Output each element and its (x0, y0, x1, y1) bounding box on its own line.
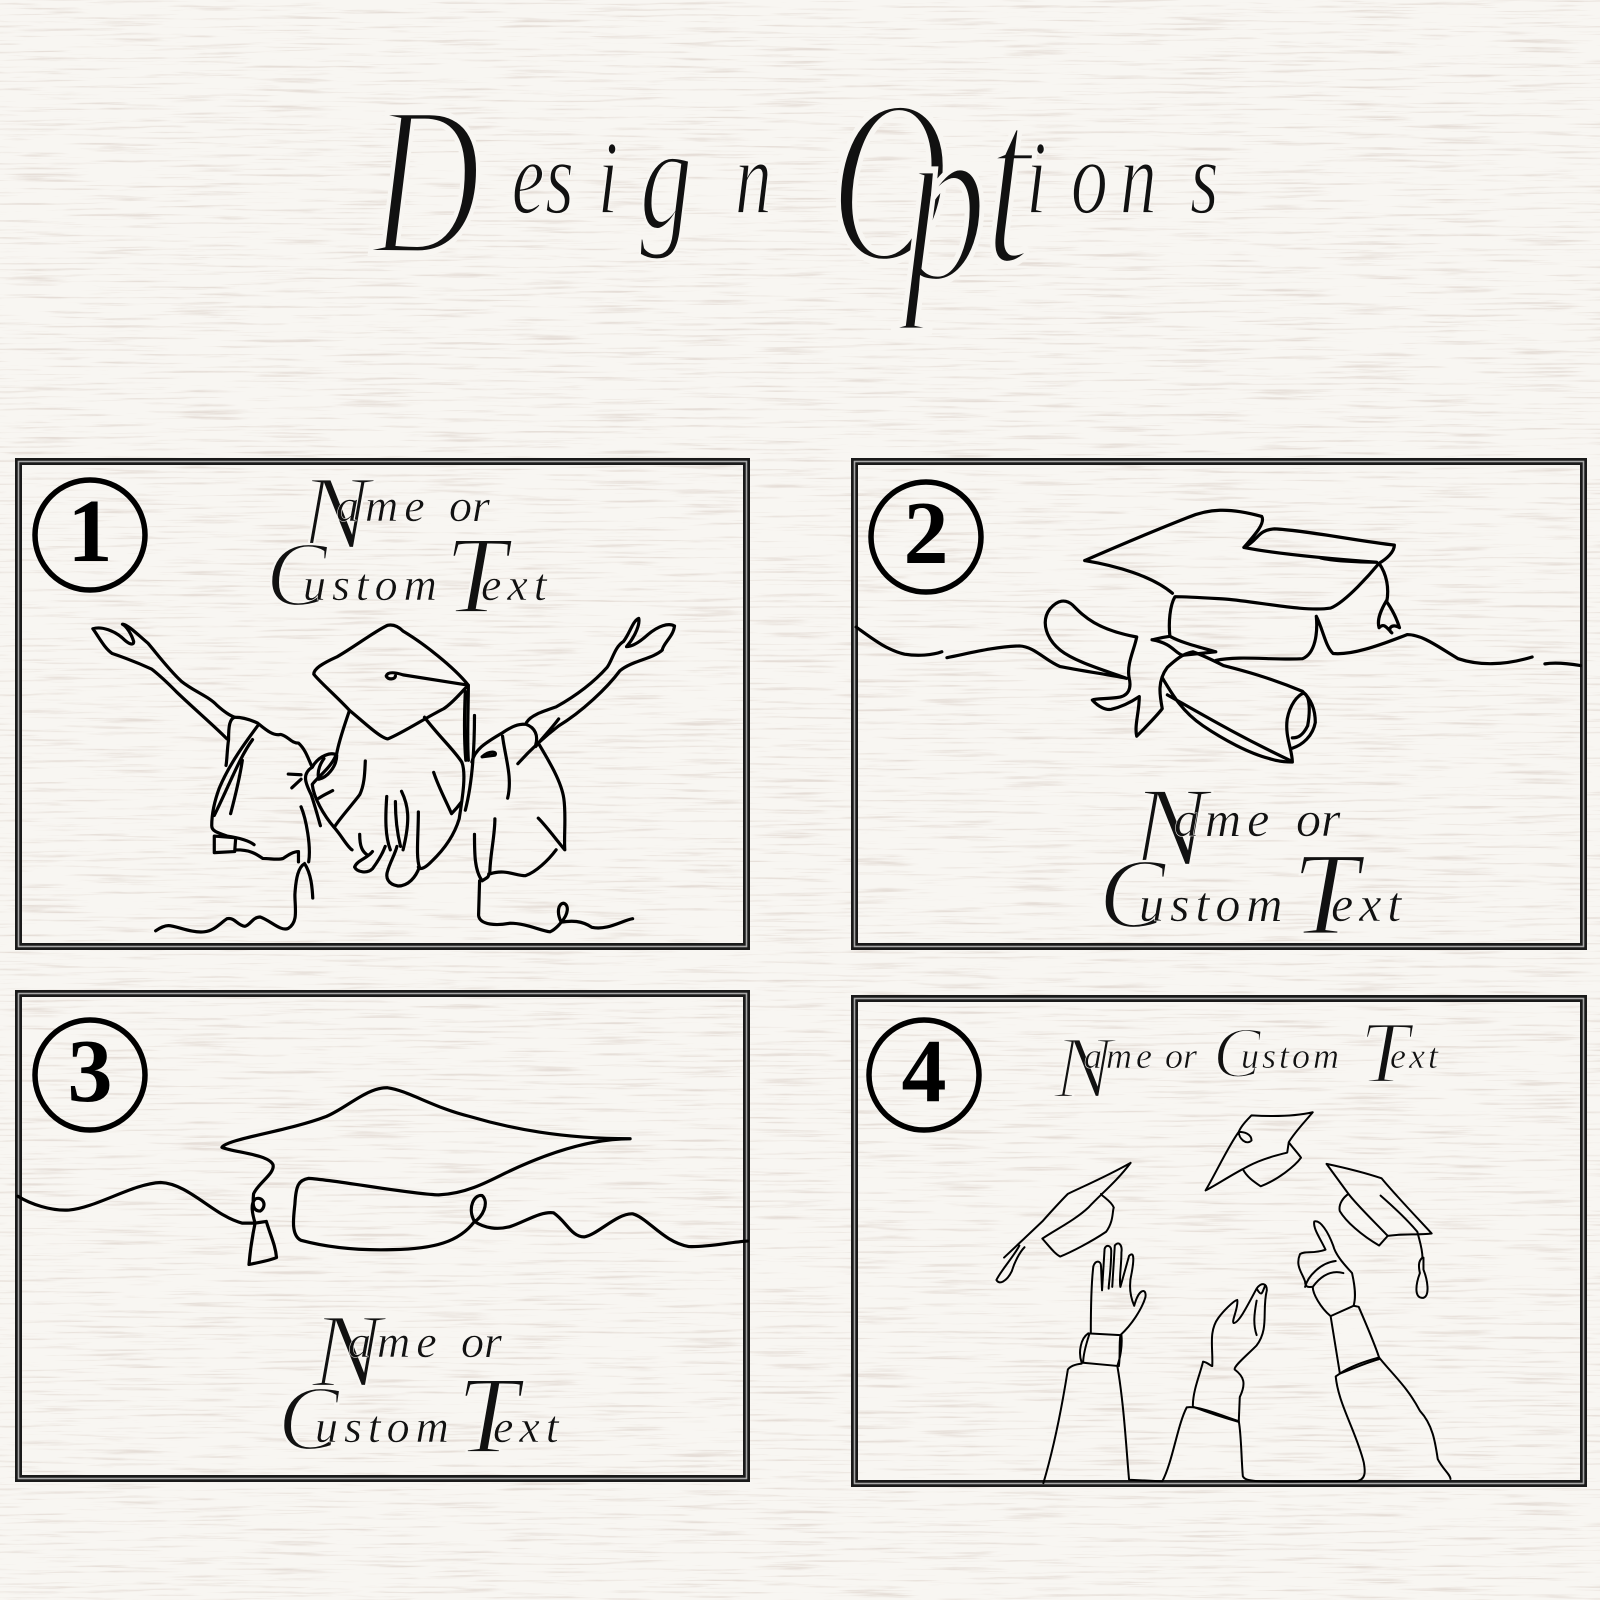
panel 2 frame (854, 462, 1584, 946)
custom text 3: T (457, 1354, 525, 1476)
number badge 2: 2 (904, 484, 948, 583)
custom text 4: or (1165, 1036, 1198, 1076)
custom text 4: ame (1084, 1036, 1156, 1076)
custom text 3: C (278, 1367, 341, 1469)
panel 3 frame (18, 994, 746, 1478)
title: ions (1026, 119, 1219, 236)
custom text 4: ustom (1241, 1036, 1342, 1076)
number badge 4: 4 (902, 1022, 946, 1121)
illustration: three hands tossing caps (996, 1112, 1451, 1483)
custom text 2: ustom (1139, 876, 1288, 932)
custom text 3: ame (348, 1316, 443, 1367)
title: D (369, 63, 480, 301)
panel: option 3 (18, 994, 747, 1478)
custom text 1: T (445, 514, 513, 636)
custom text 2: N (1131, 765, 1213, 890)
panel 1 frame (18, 462, 746, 946)
title: i (598, 119, 618, 236)
panel: option 1 (18, 454, 746, 946)
panel: option 2 (854, 462, 1584, 960)
custom text 3: ext (493, 1401, 565, 1452)
illustration: cap drawn from a single wave line (18, 1088, 747, 1264)
custom text 2: or (1296, 791, 1341, 847)
title: O (830, 50, 949, 311)
custom text 2: C (1099, 838, 1167, 949)
number badge 1: 1 (68, 482, 112, 581)
title: n (735, 119, 772, 236)
custom text 2: ext (1331, 876, 1407, 932)
custom text 4: ext (1390, 1036, 1441, 1076)
number badge 4 (869, 1020, 979, 1130)
title: g (640, 96, 692, 262)
custom text 1: N (299, 454, 375, 571)
panel: option 4 (854, 998, 1584, 1484)
panel 4 frame (854, 998, 1584, 1484)
number badge 3 (35, 1020, 145, 1130)
title: es (512, 119, 574, 236)
custom text 4: N (1053, 1020, 1117, 1117)
number badge 2 (871, 482, 981, 592)
custom text 2: ame (1174, 791, 1275, 847)
illustration: cap and diploma on a wave line (856, 510, 1581, 762)
custom text 2: T (1292, 828, 1366, 960)
custom text 1: C (266, 523, 329, 625)
custom text 1: or (449, 480, 491, 531)
title: p (892, 66, 987, 332)
illustration: three graduates with raised arms (93, 618, 674, 932)
custom text 1: ext (481, 559, 553, 610)
custom text 1: ame (336, 480, 431, 531)
number badge 3: 3 (68, 1022, 112, 1121)
custom text 3: N (311, 1292, 387, 1409)
custom text 1: ustom (303, 559, 443, 610)
number badge 1 (35, 480, 145, 590)
custom text 3: ustom (315, 1401, 455, 1452)
custom text 3: or (461, 1316, 503, 1367)
custom text 4: T (1360, 1005, 1415, 1102)
title: t (985, 48, 1035, 314)
custom text 4: C (1213, 1013, 1262, 1093)
